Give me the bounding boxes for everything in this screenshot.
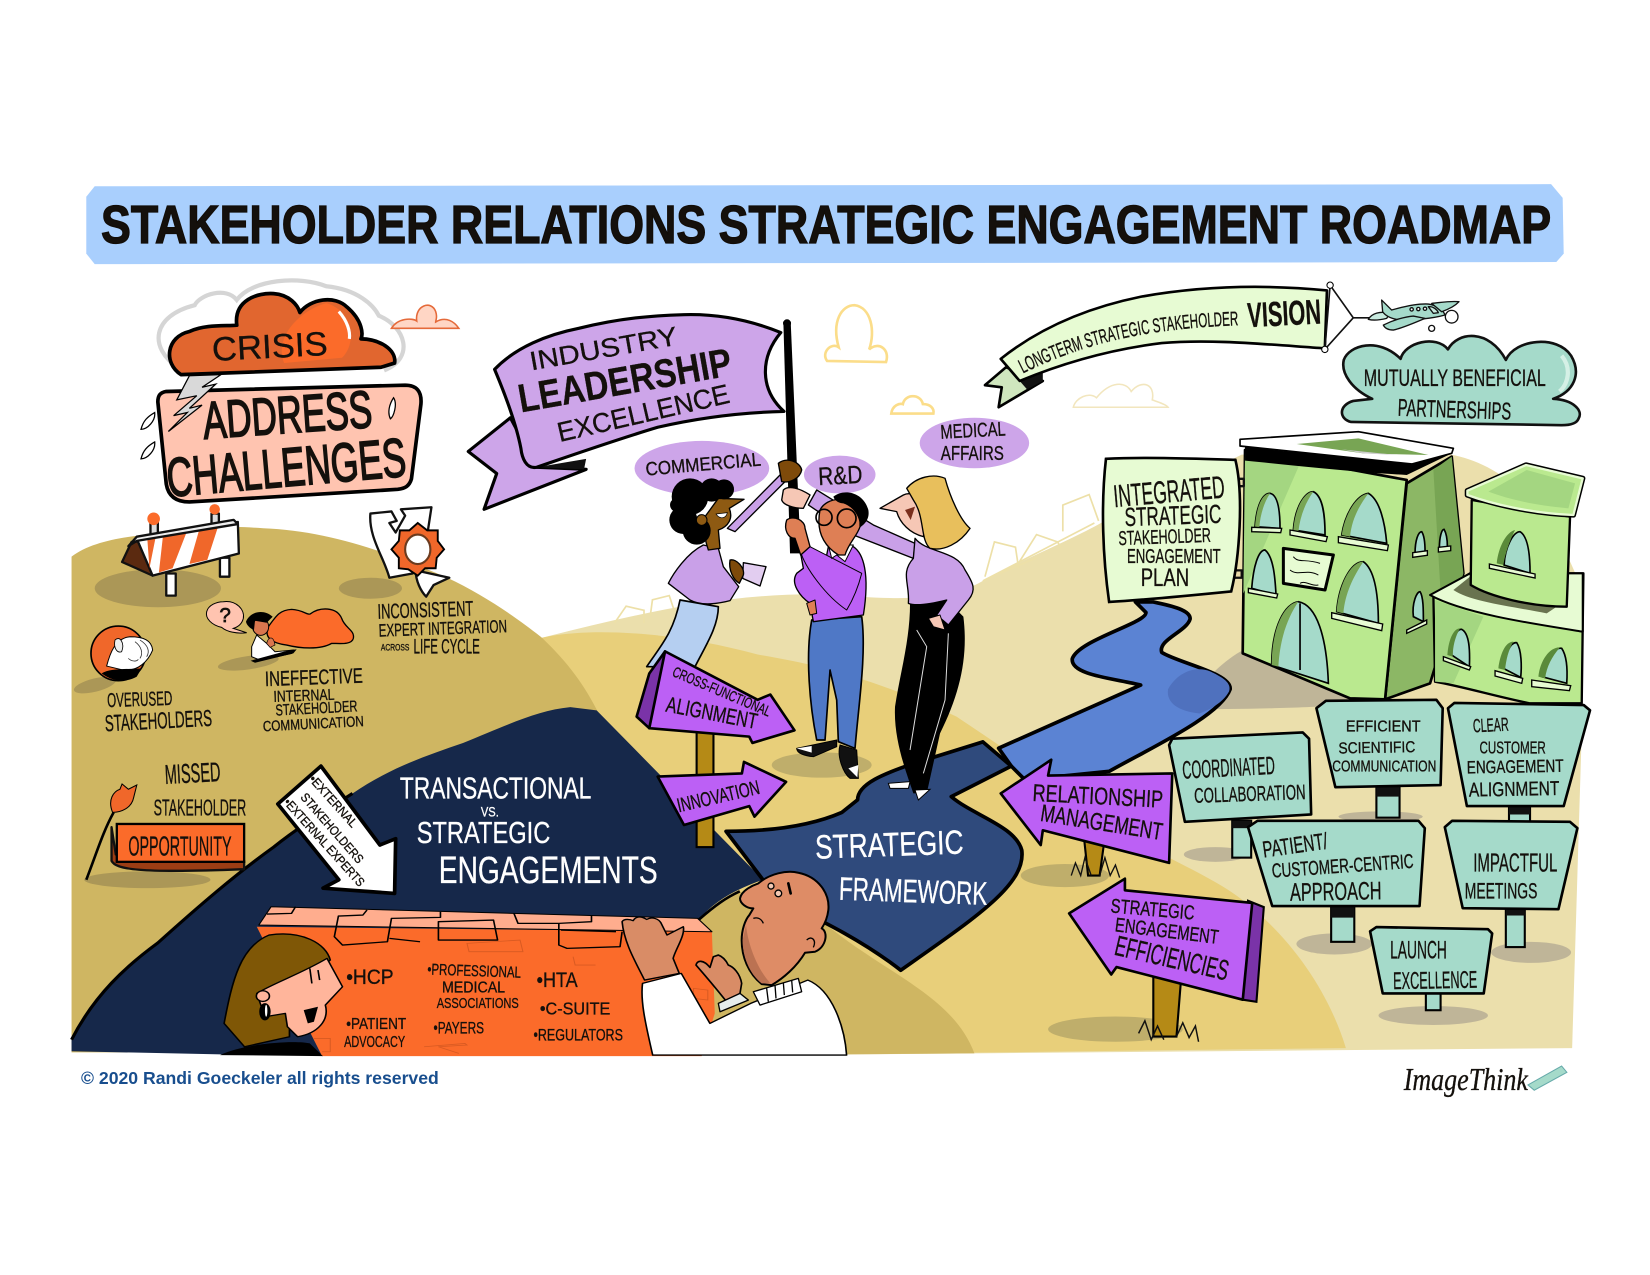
person: R&D [782,488,869,778]
flag banner: industry leadership excellence [468,315,784,509]
address challenges sign: CHALLENGES [164,426,408,509]
arrow sign: strategic engagement efficiencies: STRATEGIC [1110,895,1196,925]
navy road: transactional vs strategic engagements [72,707,763,1054]
sign: clear customer engagement alignment: ENGAGEMENT [1467,756,1564,777]
brick wall with stakeholders: ASSOCIATIONS [437,996,519,1012]
inconsistent expert integration label: LIFE CYCLE [414,635,480,658]
decorative yellow clouds [825,305,1168,414]
man's left hand and sweater body [622,917,847,1055]
background: yellow middle hill [542,632,1346,1055]
ineffective communication label: INEFFECTIVE [265,665,363,691]
sign: coordinated collaboration: COLLABORATION [1194,781,1306,808]
strategic framework shape: FRAMEWORK [838,870,988,912]
arrow sign: relationship management [1001,760,1172,863]
sign: patient customer-centric approach: PATIENT/ [1261,828,1329,863]
arrow sign: strategic engagement efficiencies: EFFICIENCIES [1112,930,1232,987]
missed stakeholder opportunity: MISSED [164,756,221,790]
background: tan left hill [72,527,600,1052]
overused stakeholders label: OVERUSED [107,688,173,712]
vision banner and tow line: VISION [1246,293,1322,335]
integrated plan sign: ENGAGEMENT [1127,546,1221,568]
integrated plan sign: PLAN [1141,564,1189,592]
label bubble: medical affairs [920,418,1029,468]
sign: impactful meetings: MEETINGS [1465,879,1537,904]
ineffective communication label: COMMUNICATION [262,714,364,735]
icon: person under orange cloud: ? [219,604,231,627]
background: pale hill on the right [542,455,1582,1055]
shadow and post: relationship sign [1021,837,1120,887]
strategic framework shape [726,742,1022,970]
label bubble: commercial: COMMERCIAL [645,450,762,481]
white arrow: external stakeholders and experts: •EXTERNAL [306,772,360,830]
bald man looking over the wall [696,872,828,1012]
icon: airplane [1368,300,1459,331]
inconsistent expert integration label: EXPERT INTEGRATION [378,616,507,641]
sign: launch excellence: LAUNCH [1390,937,1447,965]
sign: efficient scientific communication: SCIENTIFIC [1338,739,1415,757]
arrow sign: relationship management: MANAGEMENT [1039,800,1165,846]
integrated plan sign: STAKEHOLDER [1118,525,1211,550]
icon: lightning bolt [168,375,221,431]
overused stakeholders label: STAKEHOLDERS [104,705,213,736]
label bubble: commercial [635,441,769,496]
arrow sign: strategic engagement efficiencies: ENGAGEMENT [1114,914,1220,949]
vision banner and tow line: LONGTERM STRATEGIC STAKEHOLDER [1018,312,1238,374]
sign: efficient scientific communication: EFFICIENT [1346,718,1421,735]
sign: coordinated collaboration: COORDINATED [1182,752,1276,785]
white arrow: external stakeholders and experts [278,766,396,893]
arrow sign: relationship management: RELATIONSHIP [1032,780,1164,814]
sign: launch excellence: EXCELLENCE [1393,967,1478,995]
brick wall with stakeholders [220,907,847,1056]
brick wall with stakeholders: •PATIENT [346,1016,406,1033]
vision banner and tow line [984,282,1369,409]
ineffective communication label [262,665,364,735]
arrow sign: strategic engagement efficiencies [1069,879,1264,1002]
label bubble: medical affairs: AFFAIRS [941,443,1004,465]
ineffective communication label: INTERNAL [273,687,335,706]
arrow sign: cross-functional alignment: CROSS-FUNCTIONAL [670,665,773,720]
address challenges sign: ADDRESS [201,380,374,451]
brick wall with stakeholders: MEDICAL [442,979,505,996]
flag banner: industry leadership excellence: EXCELLENCE [554,378,732,448]
label bubble: R&D [804,456,876,494]
sign: impactful meetings [1445,821,1577,909]
people holding the flag pole [647,319,973,800]
town sketch on the horizon [615,495,1099,623]
arrow sign: cross-functional alignment [637,651,794,743]
label bubble: R&D: R&D [818,461,863,491]
brick wall with stakeholders: ADVOCACY [344,1034,405,1051]
brick wall with stakeholders: •PROFESSIONAL [427,961,521,982]
sign: efficient scientific communication: COMMUNICATION [1332,758,1436,775]
brick wall with stakeholders: •PAYERS [434,1018,484,1037]
sign: clear customer engagement alignment [1448,703,1590,806]
integrated plan sign: INTEGRATED [1112,469,1226,514]
integrated plan sign [1103,458,1244,602]
mutually beneficial partnerships cloud [1342,336,1580,426]
address challenges sign [141,380,421,509]
icon: torn certificate with seal [339,507,449,599]
green buildings [1240,432,1583,703]
arrow sign: innovation: INNOVATION [675,777,762,817]
missed stakeholder opportunity [84,756,246,888]
woman peeking over the wall [220,934,342,1056]
sign: clear customer engagement alignment: CUSTOMER [1480,737,1546,757]
sign shadows and posts [1184,784,1571,1025]
flag banner: industry leadership excellence: INDUSTRY [527,321,680,376]
sign: patient customer-centric approach: CUSTOMER-CENTRIC [1271,851,1414,883]
arrow sign: innovation [658,762,786,825]
shadow and post: efficiencies sign [1048,973,1199,1042]
navy road: transactional vs strategic engagements: VS. [481,805,499,820]
inconsistent expert integration label: INCONSISTENT [377,597,474,624]
person: commercial [647,460,802,667]
ineffective communication label: STAKEHOLDER [275,698,358,720]
mutually beneficial partnerships cloud: PARTNERSHIPS [1397,395,1512,426]
mutually beneficial partnerships cloud: MUTUALLY BENEFICIAL [1364,365,1546,392]
post: cross-functional signpost [657,703,713,847]
crisis cloud: CRISIS [211,326,329,369]
sign: patient customer-centric approach [1248,821,1425,907]
missed stakeholder opportunity: OPPORTUNITY [128,831,232,862]
missed stakeholder opportunity: STAKEHOLDER [154,795,246,821]
sign: launch excellence [1370,927,1492,995]
flag banner: industry leadership excellence: LEADERSHIP [515,341,735,421]
sign: patient customer-centric approach: APPROACH [1290,877,1382,907]
imagethink signature with marker: ImageThink [1403,1062,1529,1097]
arrow sign: cross-functional alignment: ALIGNMENT [664,692,760,734]
brick wall with stakeholders: •HTA [537,969,578,992]
icon: road barricade [95,504,239,607]
copyright line: © 2020 Randi Goeckeler all rights reserved [81,1068,439,1088]
white arrow: external stakeholders and experts: •EXTERNAL EXPERTS [281,796,367,889]
integrated plan sign: STRATEGIC [1124,499,1222,532]
navy road: transactional vs strategic engagements: STRATEGIC [417,816,550,850]
brick wall with stakeholders: •HCP [346,966,394,989]
icon: overused stakeholder [72,626,153,697]
person: medical affairs [808,476,973,800]
navy road: transactional vs strategic engagements: ENGAGEMENTS [439,850,658,892]
brick wall with stakeholders: •REGULATORS [534,1026,623,1045]
white arrow: external stakeholders and experts: STAKEHOLDERS [298,790,366,866]
icon: person under orange cloud [206,602,354,674]
sign: impactful meetings: IMPACTFUL [1473,847,1557,877]
icon: pink cloud [391,305,459,328]
brick wall with stakeholders: •C-SUITE [540,998,610,1018]
label bubble: medical affairs: MEDICAL [940,418,1006,444]
overused stakeholders label [104,688,213,736]
sign: efficient scientific communication [1316,700,1443,787]
sign: clear customer engagement alignment: CLEAR [1472,715,1509,737]
blue road to the building [999,602,1230,780]
inconsistent expert integration label: ACROSS [381,642,409,653]
background: tan knoll behind the man [699,891,974,1055]
sign: clear customer engagement alignment: ALIGNMENT [1469,778,1560,802]
inconsistent expert integration label [377,597,507,658]
crisis cloud [159,280,404,375]
building shadow on the ground [1184,651,1385,709]
navy road: transactional vs strategic engagements: TRANSACTIONAL [400,772,591,806]
sign: coordinated collaboration [1169,732,1311,822]
strategic framework shape: STRATEGIC [815,825,964,867]
